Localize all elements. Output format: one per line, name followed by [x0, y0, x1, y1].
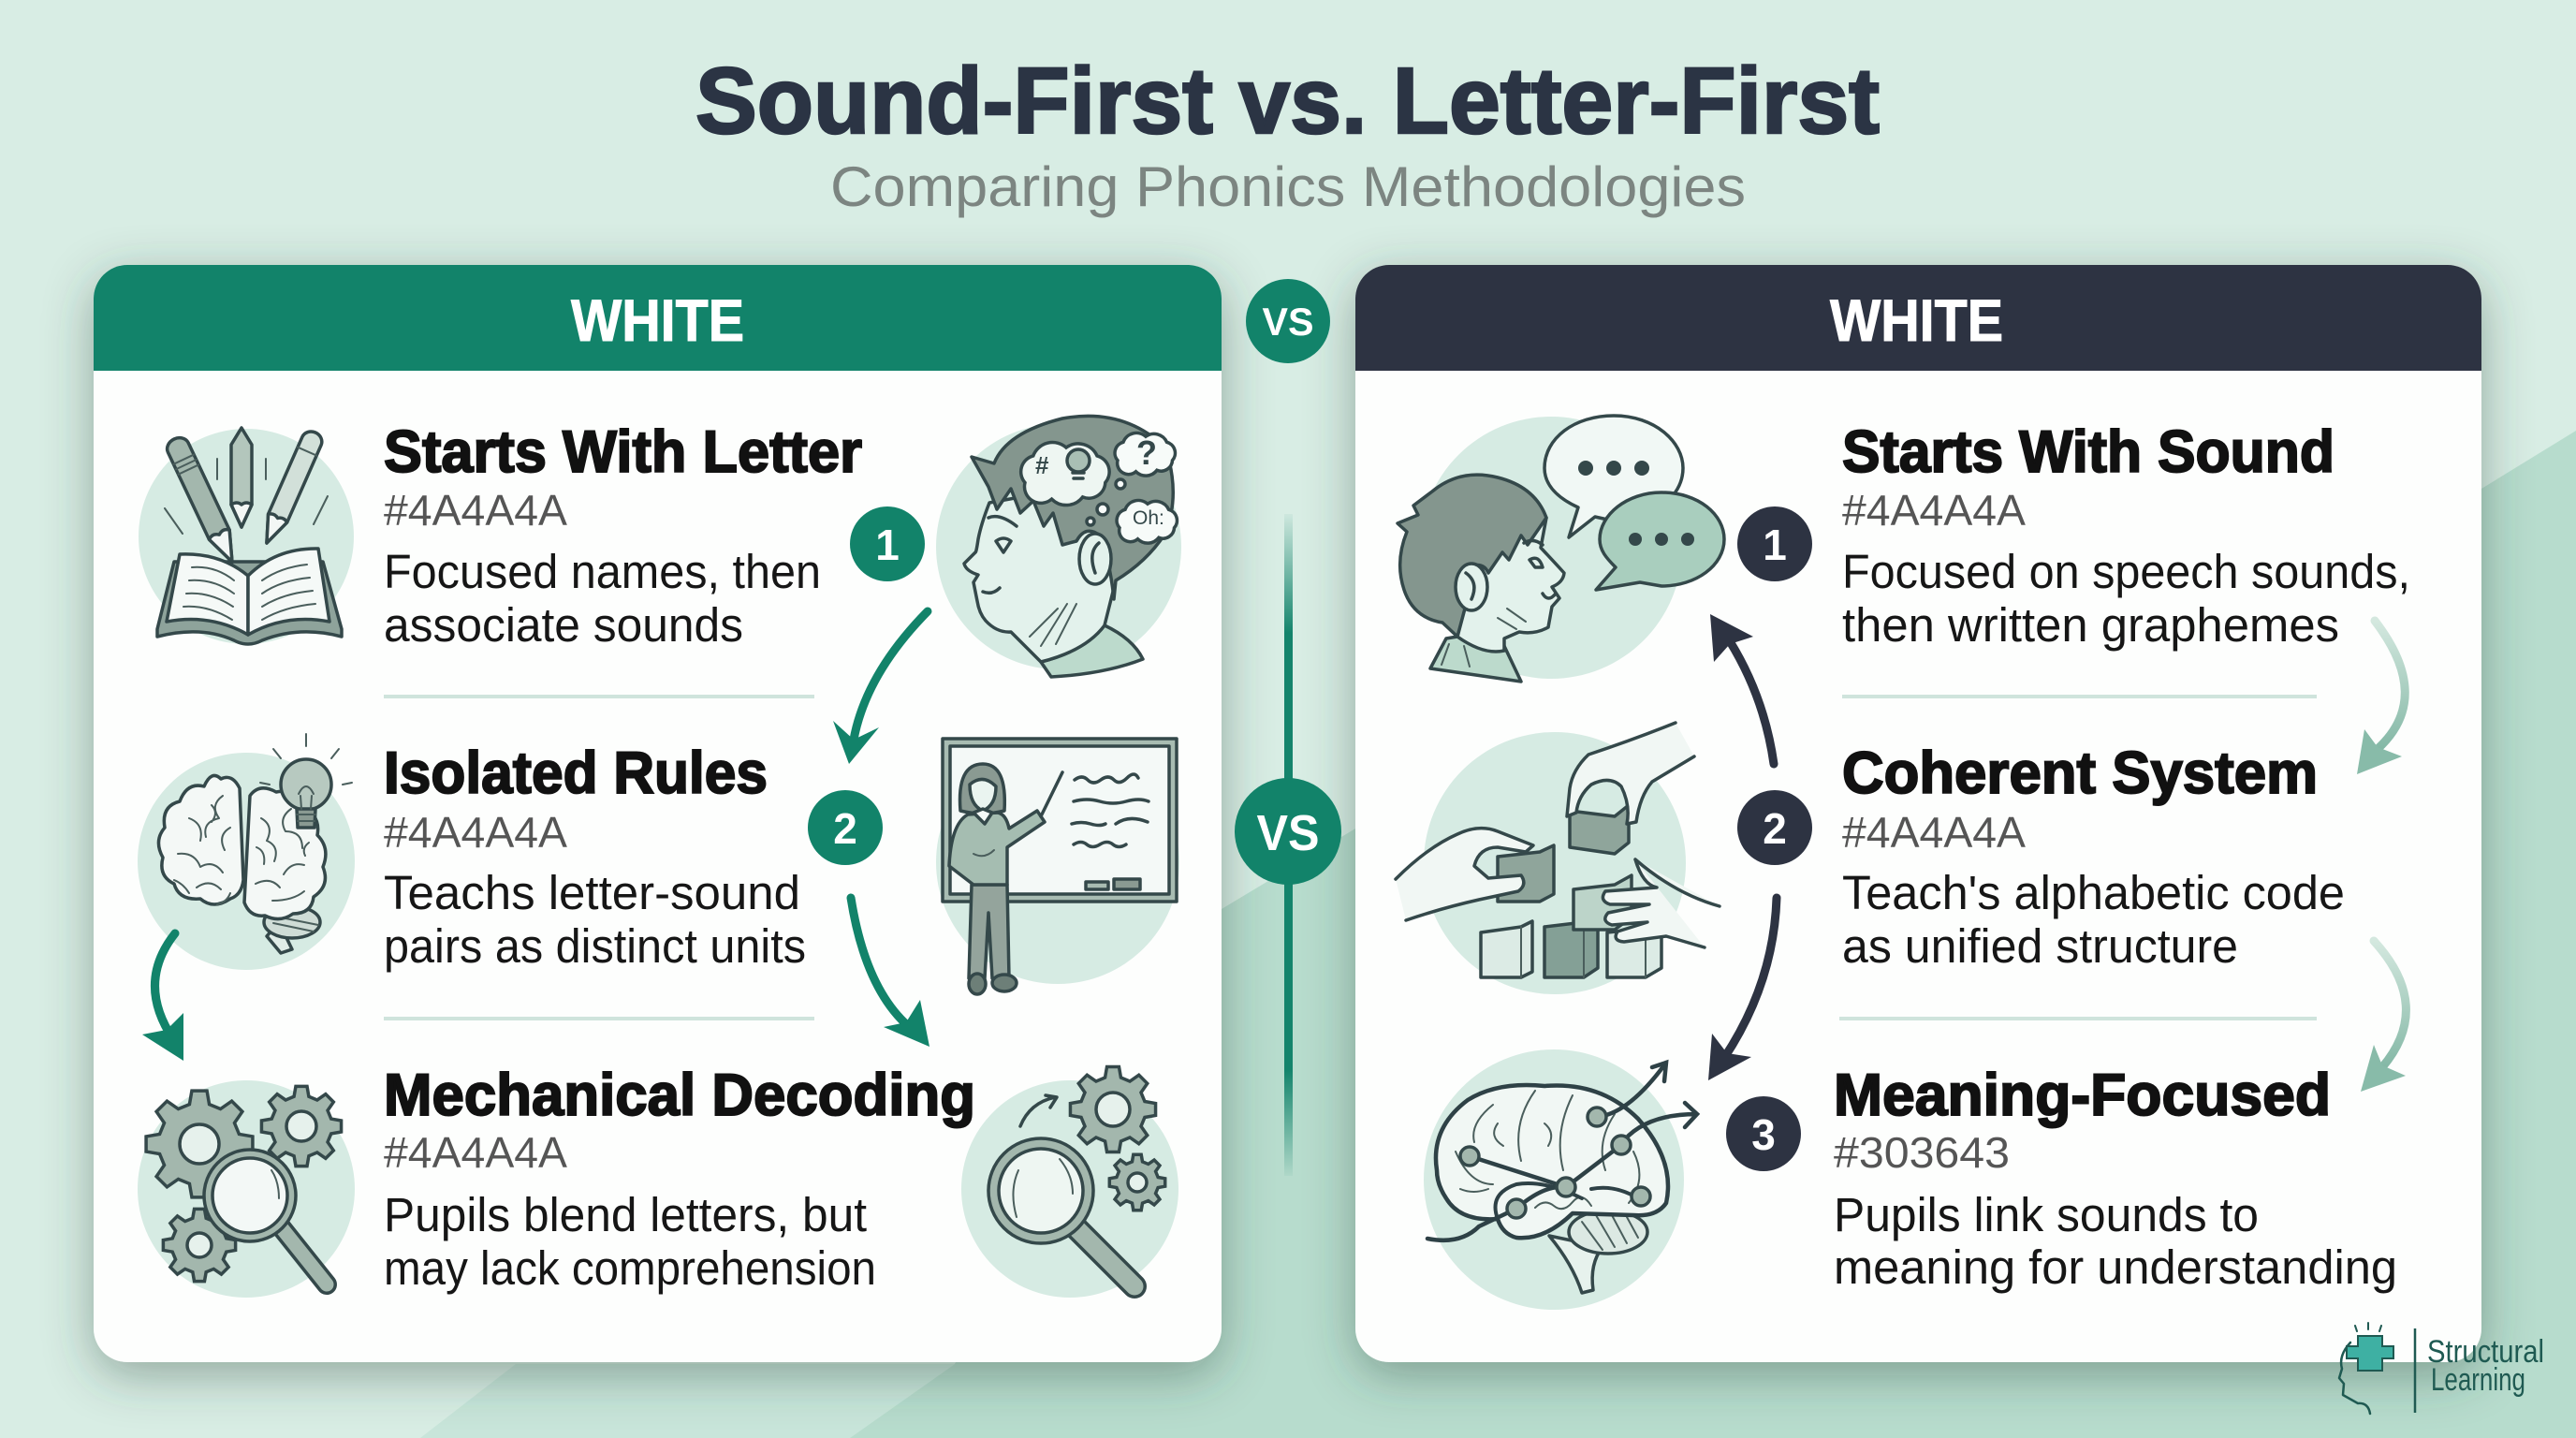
panel header	[94, 265, 1222, 371]
arrow: faded right 1	[2357, 621, 2405, 774]
text block: coherent system: as unified structure	[1842, 919, 2238, 973]
text block: isolated rules: pairs as distinct units	[384, 919, 806, 973]
text block: coherent system: Coherent System	[1842, 741, 2318, 806]
icon: gears and magnifier	[138, 1080, 355, 1298]
text block: starts with sound: Focused on speech sounds,	[1842, 545, 2410, 598]
panel header: WHITE	[1830, 288, 2003, 354]
center divider with vs badge	[1235, 514, 1341, 1176]
arrow: faded right 2	[2361, 941, 2406, 1092]
text block: coherent system: #4A4A4A	[1842, 808, 2026, 857]
step badge 2: 2	[833, 804, 857, 853]
arrow: left curved	[142, 933, 183, 1061]
arrow: step 2 to 1	[1710, 614, 1774, 764]
text block: mechanical decoding: may lack comprehension	[384, 1241, 876, 1295]
logo: structural learning: Structural	[2427, 1334, 2544, 1370]
icon: brain and lightbulb	[138, 734, 355, 970]
text block: meaning-focused	[1834, 1063, 2397, 1294]
text block: coherent system	[1842, 741, 2345, 973]
text block: starts with letter: associate sounds	[384, 598, 743, 652]
icon: boy thinking: ?	[1136, 433, 1157, 472]
title: Sound-First vs. Letter-First	[695, 49, 1880, 154]
text block: meaning-focused: Meaning-Focused	[1834, 1063, 2331, 1128]
text block: isolated rules: Isolated Rules	[384, 741, 768, 806]
text block: starts with letter: Starts With Letter	[384, 419, 862, 485]
icon: magnifier and gears	[961, 1066, 1178, 1298]
text block: mechanical decoding	[384, 1063, 975, 1295]
small vs badge	[1246, 279, 1330, 363]
step badge 1	[1737, 506, 1812, 581]
icon: boy thinking: #	[1035, 451, 1049, 479]
small vs badge: VS	[1262, 300, 1314, 344]
panel: letter-first	[94, 265, 1222, 1362]
panel card	[94, 265, 1222, 1362]
text block: isolated rules: Teachs letter-sound	[384, 866, 800, 919]
arrow: step 2 to 3	[851, 898, 929, 1047]
icon: boy thinking: Oh:	[1133, 507, 1164, 529]
step badge 2	[1737, 790, 1812, 865]
arrow: step 2 to 3	[1708, 898, 1777, 1080]
text block: meaning-focused: Pupils link sounds to	[1834, 1188, 2259, 1241]
step badge 1	[850, 506, 925, 581]
text block: starts with sound: Starts With Sound	[1842, 419, 2334, 485]
icon: teacher at whiteboard	[936, 739, 1179, 994]
text block: starts with letter	[384, 419, 862, 652]
left hand	[1396, 829, 1533, 920]
text block: starts with letter: Focused names, then	[384, 545, 821, 598]
step badge 3	[1726, 1096, 1801, 1171]
icon: brain network	[1424, 1049, 1697, 1310]
center divider with vs badge: VS	[1256, 805, 1320, 861]
panel header: WHITE	[571, 288, 744, 354]
text block: coherent system: Teach's alphabetic code	[1842, 866, 2345, 919]
step badge 3: 3	[1751, 1110, 1776, 1159]
top hand	[1567, 723, 1694, 824]
text block: mechanical decoding: Pupils blend letters, but	[384, 1188, 867, 1241]
panel header	[1355, 265, 2481, 371]
logo: structural learning	[2339, 1323, 2544, 1414]
icon: hands with blocks	[1396, 723, 1720, 994]
step badge 1: 1	[875, 521, 900, 569]
text block: mechanical decoding: #4A4A4A	[384, 1128, 567, 1177]
text block: isolated rules	[384, 741, 806, 973]
text block: meaning-focused: #303643	[1834, 1128, 2010, 1177]
step badge 2: 2	[1763, 804, 1787, 853]
panel: sound-first	[1355, 265, 2481, 1362]
text block: starts with letter: #4A4A4A	[384, 486, 567, 535]
text block: starts with sound: then written graphemes	[1842, 598, 2339, 652]
bottom blocks	[1481, 916, 1661, 977]
text block: meaning-focused: meaning for understanding	[1834, 1240, 2397, 1294]
logo: structural learning: Learning	[2431, 1362, 2525, 1398]
icon: book and pencils	[139, 428, 354, 644]
text block: starts with sound: #4A4A4A	[1842, 486, 2026, 535]
step badge 1: 1	[1763, 521, 1787, 569]
text block: starts with sound	[1842, 419, 2410, 652]
arrow: step 1 to 2	[833, 611, 928, 764]
text block: isolated rules: #4A4A4A	[384, 808, 567, 857]
panel card	[1355, 265, 2481, 1362]
text block: mechanical decoding: Mechanical Decoding	[384, 1063, 975, 1128]
icon: boy thinking	[936, 416, 1181, 677]
icon: boy with speech bubbles	[1398, 416, 1724, 682]
subtitle: Comparing Phonics Methodologies	[830, 155, 1746, 218]
step badge 2	[808, 790, 883, 865]
right hand	[1603, 859, 1720, 947]
